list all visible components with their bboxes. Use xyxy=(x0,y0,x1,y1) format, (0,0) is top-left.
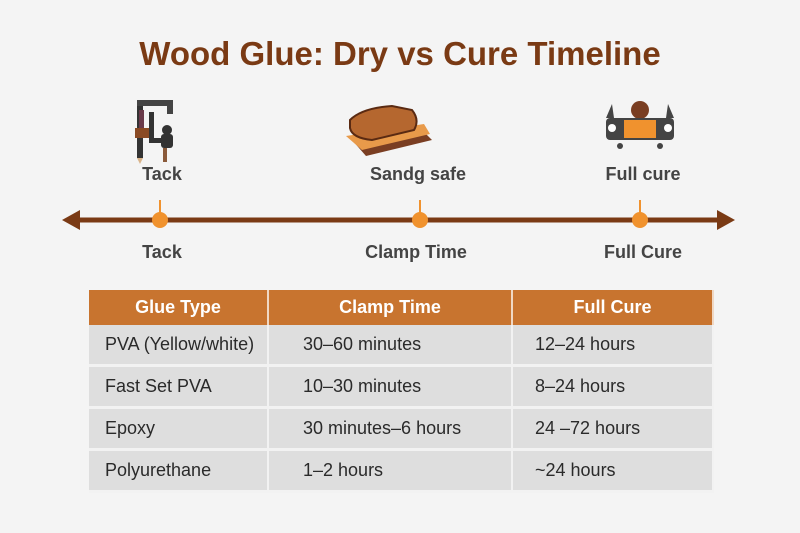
title: Wood Glue: Dry vs Cure Timeline xyxy=(139,35,661,72)
table: Polyurethane xyxy=(105,460,211,480)
timeline xyxy=(62,200,735,230)
label: Full cure top: Full cure xyxy=(605,164,680,184)
icon: clamp xyxy=(135,100,173,164)
table: 30 minutes–6 hours xyxy=(303,418,461,438)
table: Glue Type xyxy=(135,297,221,317)
table: Full Cure xyxy=(573,297,652,317)
table xyxy=(89,290,714,490)
table: 30–60 minutes xyxy=(303,334,421,354)
table: 12–24 hours xyxy=(535,334,635,354)
table: Clamp Time xyxy=(339,297,441,317)
table: ~24 hours xyxy=(535,460,616,480)
icon: vise xyxy=(606,101,674,149)
table: Epoxy xyxy=(105,418,155,438)
label: Clamp Time: Clamp Time xyxy=(365,242,467,262)
table: PVA (Yellow/white) xyxy=(105,334,254,354)
table: 8–24 hours xyxy=(535,376,625,396)
table: 10–30 minutes xyxy=(303,376,421,396)
icon: sanding block xyxy=(346,105,432,156)
label: Sandg safe: Sandg safe xyxy=(370,164,466,184)
label: Tack bottom: Tack xyxy=(142,242,182,262)
table: Fast Set PVA xyxy=(105,376,212,396)
table: 24 –72 hours xyxy=(535,418,640,438)
table: 1–2 hours xyxy=(303,460,383,480)
label: Tack top: Tack xyxy=(142,164,182,184)
label: Full Cure bottom: Full Cure xyxy=(604,242,682,262)
